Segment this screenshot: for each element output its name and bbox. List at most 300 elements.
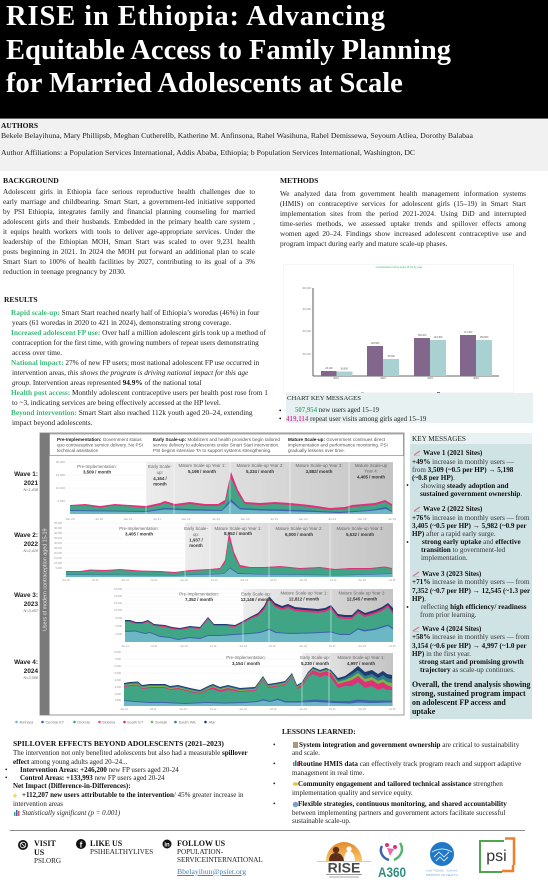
- wave 3 chart: 12,146 / month: [241, 597, 272, 602]
- wave 1 chart: Early Scale-: [148, 464, 172, 469]
- wave 2 chart: 3,405 / month: [125, 532, 153, 536]
- wave 2 chart: month: [189, 543, 203, 548]
- key messages panel: strong start and promising growth: [419, 658, 524, 666]
- bar chart: contraceptive users by year: 23,100: [325, 367, 333, 370]
- lessons learned section: •: [273, 741, 275, 749]
- wave 1 chart: Mature Scale-up Year 3:: [295, 463, 343, 468]
- wave 2 chart: Jan 22: [180, 578, 188, 582]
- wave 3 chart: 12,545 / month: [347, 596, 378, 602]
- background section: adolescent girls and their husbands. Embedded in the primary health care system ,: [3, 218, 255, 226]
- wave 3 chart: 8,000: [116, 616, 123, 620]
- logo: RISE: [317, 842, 371, 878]
- wave 1 label: N=1,438: [24, 488, 39, 492]
- wave 2 chart: 6,000 / month: [285, 532, 313, 537]
- spillover effects section: •: [5, 766, 7, 774]
- wave 3 chart: Jan 22: [180, 644, 188, 648]
- wave 1 chart: 4,164 /: [153, 476, 167, 481]
- phase definitions box: quo contraceptive service delivery. No PSI: [57, 442, 143, 448]
- results section: Health post access: Monthly adolescent contraceptive users per health post rose from 1: [11, 388, 268, 397]
- wave 2 chart: Mature Scale-up Year 2:: [275, 526, 323, 531]
- wave 3 label: Wave 3:: [14, 592, 38, 599]
- wave 1 chart: 5,198 / month: [188, 469, 216, 474]
- bar chart: contraceptive users by year: 171,400: [464, 331, 473, 334]
- bar chart: contraceptive users by year: 400,000: [302, 287, 312, 290]
- results section: intervention areas, this shows the program is driving national impact for this age: [12, 368, 248, 377]
- key messages panel: implementation.: [421, 554, 468, 562]
- wave 4 chart: Jan 21: [120, 707, 128, 711]
- results section: to ~3, indicating services are being effectively accessed at the HP level.: [12, 398, 221, 407]
- region legend: Central ET: [46, 720, 65, 724]
- results section: access over time.: [12, 348, 62, 357]
- wave 3 label: 2023: [24, 601, 38, 608]
- authors band: AUTHORS: [1, 121, 38, 130]
- results section: Beyond intervention: Smart Start also reached 112k youth aged 20–24, extending: [11, 408, 253, 417]
- chart key messages: 419,114 repeat user visits among girls aged 15–19: [286, 415, 426, 423]
- lessons learned section: Community engagement and tailored technical assistance strengthen: [298, 780, 503, 788]
- wave 4 chart: Jul 24: [329, 707, 336, 711]
- logo: ministry of health: [426, 842, 458, 877]
- spillover effects section: SPILLOVER EFFECTS BEYOND ADOLESCENTS (2021–2023): [13, 739, 224, 748]
- wave 3 label: [14, 592, 39, 613]
- key messages panel: on adolescent FP access and: [412, 698, 506, 707]
- wave 4 chart: 4,000: [114, 678, 122, 682]
- lessons learned section: Routine HMIS data can effectively track program reach and support adaptive: [298, 760, 521, 768]
- key messages panel: uptake: [412, 707, 435, 716]
- wave 3 chart: Jan 25: [358, 644, 366, 648]
- key messages panel: Wave 1 (2021 Sites): [423, 449, 482, 457]
- wave 4 chart: Early Scale-up:: [300, 655, 330, 660]
- background section: posts beginning in 2021. In 2024 the MOH put forward an additional plan to scale: [3, 248, 255, 256]
- wave 4 chart: 5,230 / month: [301, 661, 329, 666]
- wave 3 chart: 6,000: [116, 624, 123, 628]
- methods section: women aged 20–24. Findings show increased adolescent contraceptive use and: [280, 229, 526, 238]
- region legend: Oromia: [77, 720, 91, 724]
- spillover effects section: intervention areas: [13, 800, 63, 808]
- wave 2 chart: 45,000: [54, 526, 63, 530]
- background section: [3, 176, 255, 276]
- background section: leadership of the Ethiopian MOH, Smart Start was scaled to over 9,231 health: [3, 238, 255, 246]
- footer rule: [10, 830, 525, 831]
- key messages panel: HP) in the first year.: [412, 650, 471, 658]
- key messages panel: 3,405 (~0.5 per HP) → 5,982 (~0.9 per: [412, 522, 527, 530]
- bar chart: contraceptive users by year: 300,000: [302, 308, 312, 311]
- spillover effects section: [5, 739, 248, 817]
- bar chart: contraceptive users by year: 2022: [380, 377, 386, 380]
- bar chart: contraceptive users by year: 143,300: [434, 336, 443, 339]
- lessons learned section: implementation quality and service equity.: [292, 789, 413, 797]
- contact: follow us: SERVICEINTERNATIONAL: [177, 856, 263, 864]
- phase definitions box: gradually lessens over time.: [288, 448, 345, 453]
- title banner: for Married Adolescents at Scale: [6, 68, 403, 99]
- wave 3 chart: Jul 22: [210, 644, 217, 648]
- wave 4 chart: Jan 25: [358, 707, 366, 711]
- wave 1 label: [14, 471, 39, 492]
- results section: National impact: 27% of new FP users; most national adolescent FP use occurred in: [11, 358, 259, 367]
- results section: Rapid scale-up: Smart Start reached nearly half of Ethiopia’s woredas (46%) in four: [11, 308, 259, 317]
- key messages panel: showing steady adoption and: [421, 482, 509, 490]
- key message side bullets: [406, 484, 408, 608]
- key message bullets: •: [279, 407, 281, 415]
- wave 1 chart: Jul 22: [212, 517, 220, 521]
- wave 2 chart: Jul 22: [211, 578, 218, 582]
- wave 2 label: [14, 532, 39, 553]
- bar chart: contraceptive users by year: [283, 264, 514, 393]
- wave 4 chart: Jan 22: [179, 707, 187, 711]
- bar chart: contraceptive users by year: 129,500: [371, 342, 380, 345]
- phase definitions box: [50, 434, 404, 456]
- wave 4 chart: 3,000: [114, 685, 122, 689]
- wave 2 chart: 25,000: [54, 546, 63, 550]
- wave 1 chart: Jan 24: [298, 517, 308, 521]
- wave 2 chart: Pre-Implementation:: [119, 526, 159, 531]
- key messages panel: reflecting high efficiency/ readiness: [421, 603, 527, 611]
- lessons learned section: System integration and government ownership are critical to sustainability: [299, 741, 519, 749]
- wave 2 label: Wave 2:: [14, 532, 38, 539]
- key messages panel: HP).: [412, 595, 426, 603]
- wave 3 chart: Mature Scale-up Year 2:: [338, 590, 386, 596]
- wave 2 label: N=2,420: [24, 549, 39, 553]
- wave 1 chart: Jul 21: [153, 517, 161, 521]
- spillover effects section: The intervention not only benefited adolescents but also had a measurable spillover: [13, 749, 248, 757]
- wave 4 chart: [114, 650, 396, 711]
- wave 2 chart: Mature Scale-up Year 3:: [336, 526, 384, 531]
- wave trend panel: [14, 432, 404, 724]
- wave 4 label: [14, 659, 39, 680]
- wave 3 chart: Mature Scale-up Year 1:: [280, 590, 328, 596]
- wave 1 chart: Year 4:: [364, 468, 378, 474]
- wave 3 chart: Jul 21: [151, 644, 158, 648]
- wave 1 chart: 20,000: [56, 460, 65, 464]
- region legend: South ET: [127, 720, 144, 724]
- wave 2 chart: Jul 20: [92, 578, 99, 582]
- logo: ministry of health: MINISTRY OF HEALTH: [426, 873, 458, 877]
- wave 2 chart: 10,000: [54, 561, 63, 565]
- bar chart: contraceptive users by year: 76,000: [387, 355, 395, 358]
- wave 2 chart: Jul 25: [389, 578, 396, 582]
- key messages panel: strong early uptake and effective: [422, 538, 521, 546]
- wave 1 chart: 5,000: [57, 499, 65, 503]
- wave 4 chart: 6,000: [114, 664, 122, 668]
- contact: follow us: [162, 838, 263, 876]
- authors band: Author Affiliations: a Population Services International, Addis Ababa, Ethiopia; b Population Services International, Washington, DC: [1, 148, 415, 157]
- wave 1 chart: Jan 25: [357, 517, 367, 521]
- lessons learned section: •: [273, 800, 275, 808]
- key messages panel: (~0.8 per HP).: [412, 474, 455, 482]
- wave 1 chart: Jan 23: [240, 517, 250, 521]
- wave 4 chart: Jan 23: [239, 707, 247, 711]
- wave 3 chart: Jan 21: [121, 644, 129, 648]
- key messages panel: transition to government-led: [421, 546, 505, 554]
- background section: BACKGROUND: [3, 176, 59, 185]
- wave 1 chart: Jan 21: [123, 517, 133, 521]
- key messages panel: sustained government ownership.: [420, 490, 522, 498]
- wave 1 chart: Jul 25: [388, 517, 396, 521]
- wave 1 chart: Jul 20: [95, 517, 103, 521]
- chart key messages: CHART KEY MESSAGES: [287, 395, 361, 402]
- wave 2 chart: Jan 21: [121, 578, 129, 582]
- wave 4 chart: Jul 21: [150, 707, 157, 711]
- contact: visit us: VISIT: [34, 838, 56, 848]
- wave 4 label: Wave 4:: [14, 659, 38, 666]
- wave 1 chart: Mature Scale-up: [355, 463, 388, 468]
- wave 3 chart: Early Scale-up:: [241, 592, 271, 596]
- bar chart: contraceptive users by year: Contraceptive Users Aged 15-19 by year: [376, 265, 422, 269]
- key messages panel: KEY MESSAGES: [412, 434, 466, 442]
- contact: visit us: US: [34, 848, 44, 856]
- contact: like us: PSIHEALTHYLIVES: [90, 848, 153, 856]
- wave 3 chart: 7,352 / month: [185, 597, 213, 602]
- wave 2 chart: 50,000: [54, 521, 63, 525]
- wave 1 chart: Pre-Implementation:: [77, 464, 117, 469]
- key messages panel: +76% increase in monthly users — from: [412, 514, 530, 522]
- bar chart: contraceptive users by year: 150,500: [480, 336, 489, 339]
- bar chart: contraceptive users by year: 2023: [427, 377, 433, 380]
- phase definitions box: Mature Scale-up: Government continues direct: [288, 437, 386, 442]
- results section: RESULTS: [4, 295, 38, 304]
- wave 4 label: 2024: [24, 668, 38, 675]
- contact: like us: f: [80, 840, 83, 850]
- region legend: Somali: [155, 720, 167, 724]
- phase definitions box: Early Scale-up: Mobilizers and health providers begin tailored: [153, 437, 280, 442]
- wave 3 chart: 14,000: [114, 594, 123, 598]
- region legend: [15, 720, 216, 724]
- bar chart: contraceptive users by year: 2021: [333, 377, 339, 380]
- wave 4 chart: 1,000: [114, 698, 122, 702]
- region legend: South WE: [178, 720, 196, 724]
- wave 1 chart: Jul 24: [328, 517, 336, 521]
- wave 3 chart: Pre-Implementation:: [179, 592, 219, 596]
- chart key messages: [286, 393, 533, 423]
- spillover effects section: Net Impact (Difference-in-Differences):: [13, 782, 131, 790]
- background section: Adolescent girls in Ethiopia face serious reproductive health challenges due to: [3, 188, 255, 196]
- logo: RISE: RISE: [328, 860, 360, 876]
- methods section: [280, 176, 526, 248]
- wave 3 chart: Jan 24: [299, 644, 307, 648]
- phase definitions box: Pre-Implementation: Government status: [57, 437, 142, 442]
- wave 1 chart: 10,000: [56, 486, 65, 490]
- wave 1 chart: Jan 22: [181, 517, 191, 521]
- wave 4 chart: Pre-Implementation:: [226, 655, 266, 660]
- bar chart: contraceptive users by year: 200,000: [302, 330, 312, 333]
- wave 2 chart: Jan 25: [358, 578, 366, 582]
- wave 1 chart: 3,509 / month: [83, 470, 111, 474]
- key messages panel: +49% increase in monthly users —: [412, 458, 514, 466]
- wave 2 label: 2022: [24, 541, 38, 548]
- wave 4 chart: Jul 23: [270, 707, 277, 711]
- wave 3 chart: Jan 23: [239, 644, 247, 648]
- spillover effects section: •: [5, 774, 7, 782]
- wave 2 chart: Jan 20: [62, 578, 70, 582]
- wave 1 chart: up:: [157, 470, 163, 475]
- lessons learned section: management in real time.: [292, 769, 364, 777]
- contact: visit us: PSI.ORG: [34, 857, 61, 865]
- contact: follow us: FOLLOW US: [177, 838, 225, 848]
- wave 3 chart: 2,000: [116, 632, 123, 636]
- results section: Increased adolescent FP use: Over half a million adolescent girls took up a method of: [11, 328, 266, 337]
- key messages panel: +58% increase in monthly users — from: [412, 633, 530, 641]
- wave 1 chart: [56, 460, 396, 521]
- wave 2 chart: 5,632 / month: [346, 532, 374, 537]
- lessons learned section: and scale.: [292, 749, 320, 757]
- wave icons: trend marks: [412, 450, 420, 632]
- contact: visit us: [18, 838, 61, 865]
- wave 4 chart: 8,000: [114, 650, 122, 654]
- methods section: implementation sites from the period 2021-2024. Using DiD and interrupted: [280, 209, 526, 218]
- lessons learned section: between implementing partners and government actors facilitate successful: [292, 809, 505, 817]
- region legend: Sidama: [102, 720, 116, 724]
- key messages panel: HP) after a rapid early surge.: [412, 530, 496, 538]
- wave 2 chart: Mature Scale-up Year 1:: [214, 526, 262, 531]
- methods section: program impact during early and mature scale-up phases.: [280, 239, 447, 248]
- contact: follow us: Bbelayihun@psiet.org: [177, 866, 246, 876]
- wave 2 chart: 30,000: [54, 541, 63, 545]
- wave 4 chart: Jul 22: [210, 707, 217, 711]
- key messages panel: trajectory as scale-up continues.: [420, 666, 515, 674]
- wave 4 label: N=2,088: [24, 676, 39, 680]
- wave 2 chart: Jul 23: [270, 578, 277, 582]
- wave 2 chart: Early Scale-: [184, 526, 208, 531]
- spillover effects section: Intervention Areas: +246,200 new FP users aged 20-24: [20, 766, 179, 774]
- title banner: [0, 0, 548, 118]
- key message bullets: •: [279, 415, 281, 423]
- wave 1 chart: 3,882/ month: [306, 469, 333, 474]
- wave 1 chart: Mature Scale-up Year 2:: [236, 463, 284, 468]
- wave 3 chart: 10,000: [114, 608, 123, 612]
- lessons learned section: Flexible strategies, continuous monitoring, and shared accountability: [298, 800, 507, 808]
- wave 4 chart: 3,154 / month: [232, 661, 260, 666]
- wave 4 chart: Jul 25: [389, 707, 396, 711]
- background section: by PSI Ethiopia, integrates family and financial planning counseling for married: [3, 208, 255, 216]
- key messages panel: strong, sustained program impact: [412, 689, 526, 698]
- wave 3 chart: Jul 24: [329, 644, 336, 648]
- wave 3 chart: 15,000: [114, 587, 123, 591]
- wave 4 chart: Jan 24: [299, 707, 307, 711]
- key message bullets: [279, 407, 282, 423]
- methods section: time-series methods, we assessed uptake trends and spillover effects among: [280, 219, 526, 228]
- wave 3 chart: 12,812 / month: [289, 596, 320, 602]
- wave 1 chart: Jan 20: [65, 517, 75, 521]
- region legend: Amhara: [20, 720, 34, 724]
- phase definitions box: implementation and performance monitoring. PSI: [288, 442, 388, 448]
- wave 3 chart: 12,000: [114, 601, 123, 605]
- background section: it equips health workers with tools to deliver age-appropriate services. Under the: [3, 228, 255, 236]
- phase definitions box: technical assistance: [57, 448, 99, 453]
- background section: early marriage and childbearing. Smart Start, a government-led initiative supported: [3, 198, 255, 206]
- results section: contraception for the first time, with growing numbers of repeat users demonstrating: [12, 338, 259, 347]
- wave 3 chart: Jul 23: [269, 644, 276, 648]
- logo: PSI: psi: [486, 848, 507, 865]
- key messages panel: [410, 433, 532, 719]
- results section: years (61 woredas in 2020 to 421 in 2024), demonstrating strong coverage.: [12, 318, 231, 327]
- chart key messages: 507,954 new users aged 15–19: [295, 407, 379, 414]
- wave 3 chart: [114, 587, 396, 648]
- wave 2 chart: Jan 24: [299, 578, 307, 582]
- bar chart: contraceptive users by year: 160,200: [418, 334, 427, 337]
- contact: follow us: POPULATION-: [177, 848, 223, 856]
- logo: PSI: [479, 837, 516, 873]
- results section: impact beyond adolescents.: [12, 418, 92, 427]
- contact: like us: [76, 838, 153, 856]
- region legend: Afar: [208, 720, 216, 724]
- phase definitions box: service delivery to adolescents under Smart Start intervention.: [153, 442, 279, 448]
- bar chart: contraceptive users by year: 100,000: [302, 353, 312, 356]
- key messages panel: Wave 3 (2023 Sites): [422, 570, 481, 578]
- wave 1 label: 2021: [24, 480, 38, 487]
- y axis band: [40, 433, 50, 715]
- methods section: We analyzed data from government health management information systems: [280, 189, 526, 198]
- key messages panel: Wave 2 (2022 Sites): [423, 505, 482, 513]
- key messages panel: Overall, the trend analysis showing: [412, 680, 530, 689]
- key messages panel: 3,154 (~0.6 per HP) → 4,997 (~1.0 per: [412, 642, 527, 650]
- logo: A360: A360: [378, 864, 406, 880]
- lessons learned section: [273, 727, 522, 825]
- bar chart: contraceptive users by year: 2024: [473, 377, 479, 380]
- contact: follow us: in: [164, 842, 170, 848]
- results section: group. Intervention areas represented 94.9% of the national total: [12, 378, 201, 387]
- wave 2 chart: 1,937 /: [189, 538, 203, 542]
- wave 2 chart: Jul 24: [330, 578, 337, 582]
- title banner: Equitable Access to Family Planning: [6, 35, 451, 66]
- wave 2 chart: 20,000: [54, 551, 63, 555]
- wave 4 chart: 2,000: [114, 692, 122, 696]
- lessons learned section: sustainable scale-up.: [292, 817, 351, 825]
- spillover effects section: Control Areas: +133,993 new FP users aged 20-24: [20, 774, 165, 782]
- wave 2 chart: up:: [193, 532, 199, 537]
- spillover effects section: Statistically significant (p = 0.001): [22, 809, 120, 817]
- background section: Smart Start to 100% of health facilities by 2027, contributing to its goal of a 3%: [3, 258, 255, 266]
- lessons learned section: LESSONS LEARNED:: [282, 727, 356, 736]
- methods section: METHODS: [280, 176, 318, 185]
- wave 1 chart: 4,405 / month: [357, 474, 385, 480]
- phase definitions box: PSI begins intensive TA to support systems strengthening.: [153, 448, 271, 453]
- wave 3 chart: Jul 25: [389, 644, 396, 648]
- bar chart: contraceptive users by year: 16,800: [340, 368, 348, 370]
- title banner: RISE in Ethiopia: Advancing: [6, 1, 386, 32]
- wave 2 chart: Jul 21: [151, 578, 158, 582]
- wave 1 chart: 15,000: [56, 473, 65, 477]
- authors band: Bekele Belayihuna, Mary Phillipsb, Meghan Cutherellb, Katherine M. Anfinsona, Rahel Wasihuna, Rahel Demissewa, Seyoum Atliea, Dorothy Balabaa: [1, 131, 473, 140]
- wave 1 chart: month: [153, 482, 167, 486]
- wave 4 chart: 7,000: [114, 657, 122, 661]
- lessons learned section: •: [273, 780, 275, 788]
- key messages panel: from prior learning.: [420, 611, 477, 619]
- methods section: (HMIS) on contraceptive services for adolescent girls (15–19) in Smart Start: [280, 199, 526, 208]
- wave 2 chart: 40,000: [54, 531, 63, 535]
- spillover effects section: effect among young adults aged 20–24...: [13, 758, 127, 766]
- background section: reduction in teenage pregnancy by 2030.: [3, 267, 126, 276]
- wave 1 chart: Jul 23: [270, 517, 278, 521]
- key messages panel: +71% increase in monthly users — from: [412, 578, 530, 586]
- wave 1 chart: Mature Scale-up Year 1:: [178, 463, 226, 468]
- wave 2 chart: [54, 521, 396, 582]
- contact: like us: LIKE US: [90, 838, 122, 848]
- wave 4 chart: Mature Scale-up Year 1:: [337, 655, 385, 660]
- logo: A360: [378, 842, 406, 880]
- logo: ministry of health: የጤና ሚኒስቴር - ኢትዮጵያ: [426, 868, 458, 872]
- wave 2 chart: 5,000: [56, 566, 63, 570]
- wave 4 chart: 5,000: [114, 671, 122, 675]
- wave 1 label: Wave 1:: [14, 471, 38, 478]
- wave 4 chart: 4,997 / month: [347, 661, 375, 666]
- wave 2 chart: 15,000: [54, 556, 63, 560]
- wave 3 label: N=3,457: [24, 609, 39, 613]
- y axis band: Users of modern contraception aged 15-19: [42, 529, 48, 631]
- key messages panel: Wave 4 (2024 Sites): [422, 625, 481, 633]
- wave 1 chart: 5,334 / month: [246, 469, 274, 474]
- spillover effects section: +112,207 new users attributable to the intervention/ 45% greater increase in: [22, 791, 244, 799]
- lessons learned section: •: [273, 760, 275, 768]
- wave 2 chart: Jan 23: [240, 578, 248, 582]
